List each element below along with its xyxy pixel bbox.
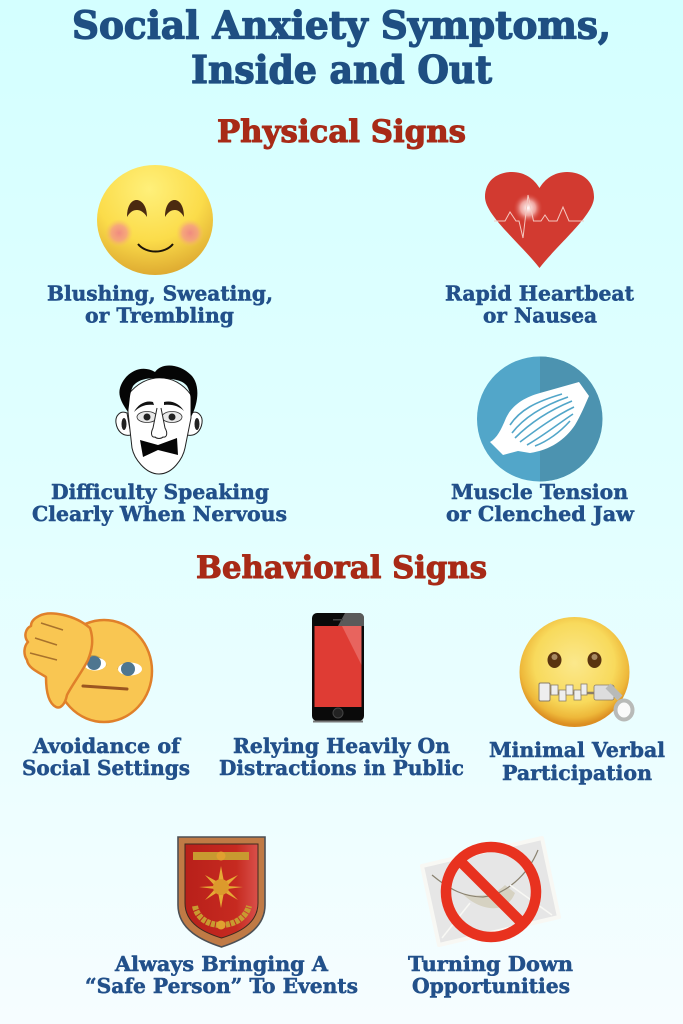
icon: blushing smiley [97, 165, 213, 275]
item: minimal verbal [489, 617, 665, 785]
label [446, 480, 635, 526]
label: Participation [502, 761, 652, 785]
label: Avoidance of [32, 734, 181, 758]
icon: shield [178, 837, 265, 947]
label: Distractions in Public [219, 756, 464, 780]
label [445, 282, 635, 328]
label: Clearly When Nervous [32, 502, 287, 526]
item: avoidance [22, 613, 190, 780]
label: Difficulty Speaking [51, 480, 269, 504]
icon: red smartphone [312, 613, 364, 722]
title [72, 4, 611, 93]
label [489, 738, 665, 785]
label [47, 282, 273, 328]
label: Turning Down [408, 952, 573, 976]
label: Opportunities [412, 974, 570, 998]
heading: physical signs: Physical Signs [217, 114, 466, 150]
label: Always Bringing A [114, 952, 329, 976]
icon: nervous man face [116, 366, 202, 474]
label [22, 734, 190, 780]
title: Inside and Out [191, 48, 492, 93]
heading: behavioral signs: Behavioral Signs [196, 550, 487, 586]
label [32, 480, 287, 526]
label: Relying Heavily On [233, 734, 450, 758]
label: “Safe Person” To Events [85, 974, 358, 998]
label: Social Settings [22, 756, 190, 780]
icon: thumbs down face [24, 613, 152, 722]
item: turning down [408, 838, 573, 998]
label: or Clenched Jaw [446, 502, 635, 526]
label: or Nausea [483, 304, 597, 328]
label: Blushing, Sweating, [47, 282, 273, 306]
item: speaking [32, 366, 287, 526]
item: safe person [85, 837, 358, 998]
label [85, 952, 358, 998]
label: Minimal Verbal [489, 738, 665, 762]
icon: heart with ecg [485, 172, 594, 268]
item: muscle tension [446, 356, 635, 526]
title: Social Anxiety Symptoms, [72, 4, 611, 48]
item: distractions [219, 613, 464, 780]
label: Muscle Tension [451, 480, 628, 504]
item: heartbeat [445, 172, 635, 328]
item: blushing [47, 165, 273, 328]
label: Rapid Heartbeat [445, 282, 635, 306]
icon: muscle [477, 356, 602, 482]
label [219, 734, 464, 780]
label [408, 952, 573, 998]
icon: zipper mouth emoji [520, 617, 632, 727]
icon: prohibited envelope [422, 838, 559, 945]
label: or Trembling [85, 304, 234, 328]
